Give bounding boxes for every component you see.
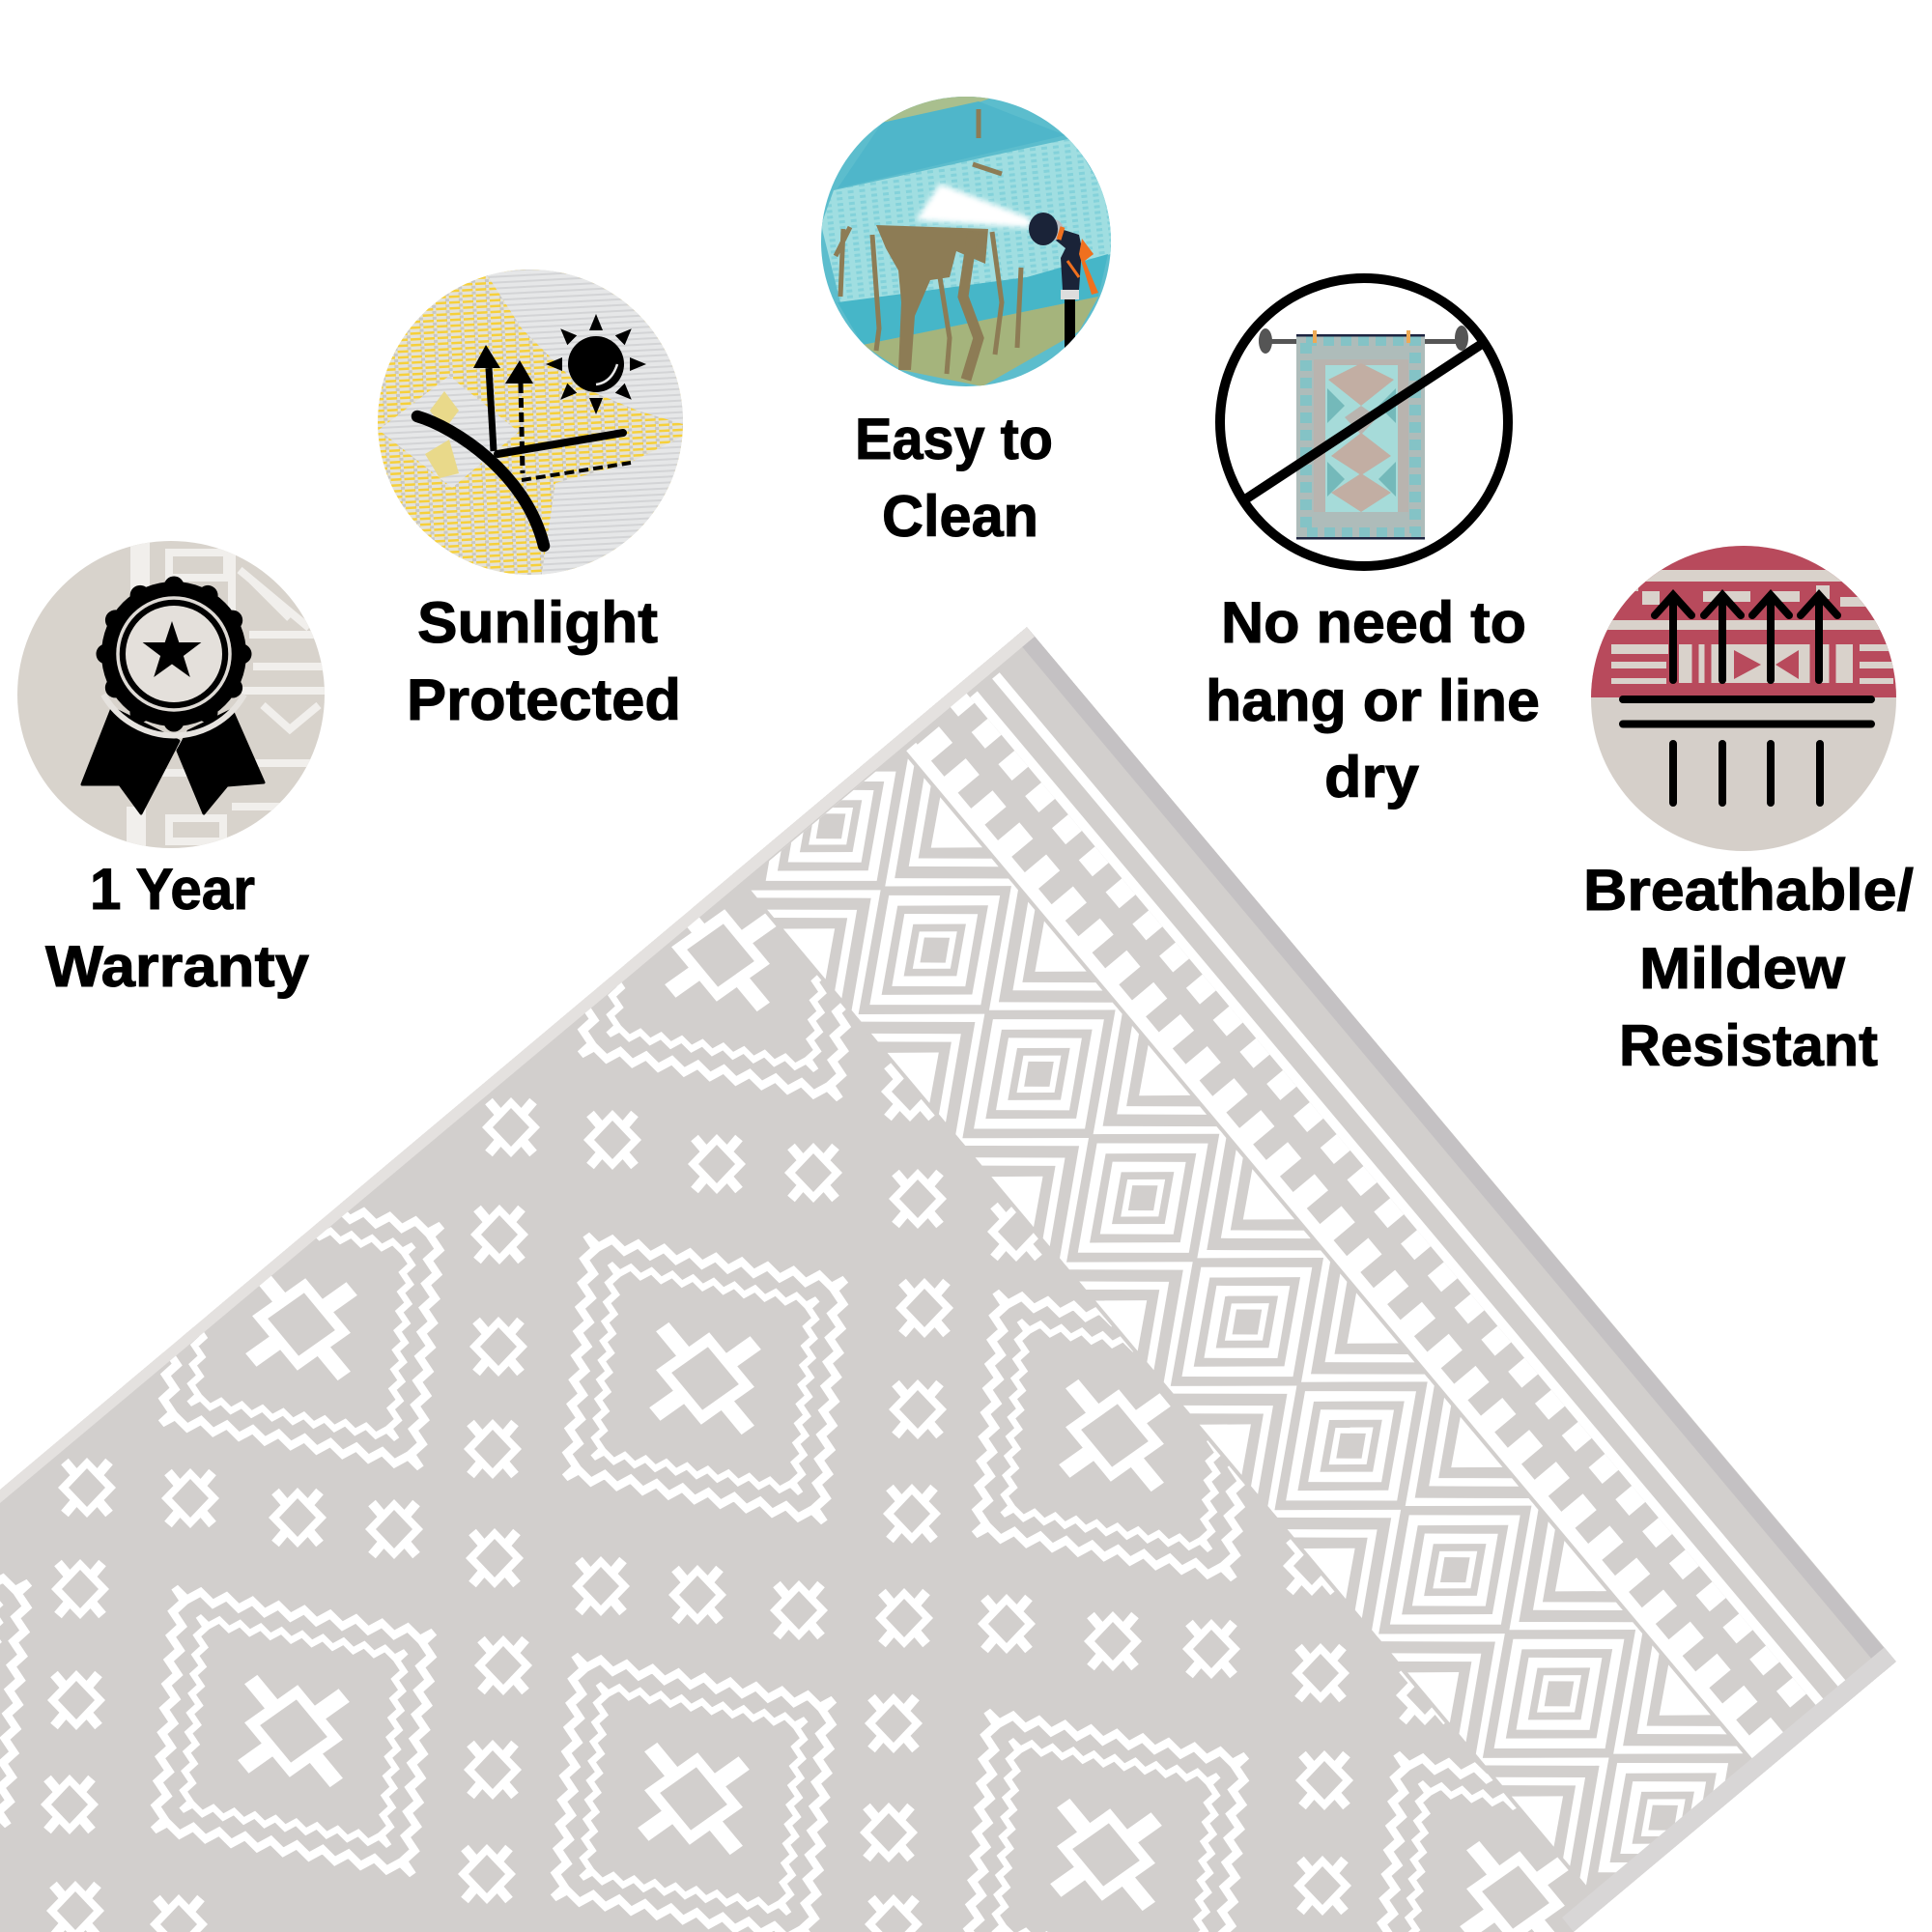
dark teal lower band	[838, 254, 1108, 345]
woven beige background	[17, 541, 327, 850]
diamond band	[752, 759, 1743, 1886]
red woven top half	[1589, 541, 1898, 697]
label: breathable: Resistant	[1619, 1013, 1878, 1078]
icon: airflow lines	[1623, 595, 1871, 803]
light patterned band	[821, 138, 1111, 302]
beige lower half	[1589, 541, 1898, 855]
label: no need to hang: hang or line	[1206, 668, 1540, 733]
dirt streaks	[836, 109, 1021, 380]
rug border bands	[703, 592, 1922, 1932]
rug photo	[0, 592, 1922, 1932]
circle: sunlight	[377, 269, 686, 580]
label: no need to hang: No need to	[1221, 590, 1526, 655]
bottom edge binding	[1562, 1647, 1896, 1932]
teal rug background	[821, 97, 1111, 386]
label: breathable	[1583, 858, 1914, 1078]
star	[143, 621, 201, 677]
top sliver	[883, 97, 989, 123]
water spray	[916, 184, 1031, 228]
clips	[1313, 330, 1410, 343]
white gap under seal	[103, 695, 244, 735]
small diamond motifs	[41, 1062, 1454, 1932]
label: sunlight: Protected	[407, 668, 681, 732]
label: warranty	[45, 857, 310, 999]
olive lower area	[863, 297, 1098, 386]
label: no need to hang: dry	[1324, 745, 1420, 810]
label: breathable: Mildew	[1639, 936, 1845, 1001]
label: sunlight: Sunlight	[417, 590, 658, 655]
circle: warranty	[17, 536, 328, 855]
prohibition ring	[1220, 278, 1508, 566]
dark teal upper band	[838, 101, 1065, 188]
circle: easy to clean	[821, 97, 1111, 386]
label: warranty: Warranty	[45, 934, 310, 999]
icon: hose nozzle	[1029, 213, 1098, 348]
label: no need to hang	[1206, 590, 1540, 810]
large zigzag medallions	[0, 811, 1656, 1932]
rug field	[0, 627, 1896, 1932]
curtain pole	[1259, 326, 1468, 354]
label: warranty: 1 Year	[90, 857, 255, 922]
icon: sun and leaf	[417, 314, 646, 546]
scalloped seal	[101, 582, 246, 726]
hanging rug	[1296, 334, 1425, 539]
checker band	[897, 680, 1824, 1759]
circle: breathable	[1589, 541, 1898, 855]
icon: no hanging	[1220, 278, 1508, 566]
woven yellow background	[377, 269, 686, 578]
ribbons	[82, 708, 179, 813]
label: sunlight	[407, 590, 681, 732]
label: easy to clean: Clean	[882, 484, 1038, 549]
label: easy to clean: Easy to	[855, 407, 1053, 471]
icon: award rosette	[82, 582, 264, 813]
white woven pattern	[127, 536, 328, 855]
prohibition slash	[1245, 344, 1482, 499]
label: breathable: Breathable/	[1583, 858, 1914, 923]
label: easy to clean	[855, 407, 1053, 549]
white-grey woven areas	[379, 269, 686, 580]
thin white line	[992, 672, 1846, 1687]
left edge binding	[0, 627, 1035, 1503]
inner yellow motif	[425, 391, 459, 478]
outer binding	[1014, 627, 1896, 1673]
